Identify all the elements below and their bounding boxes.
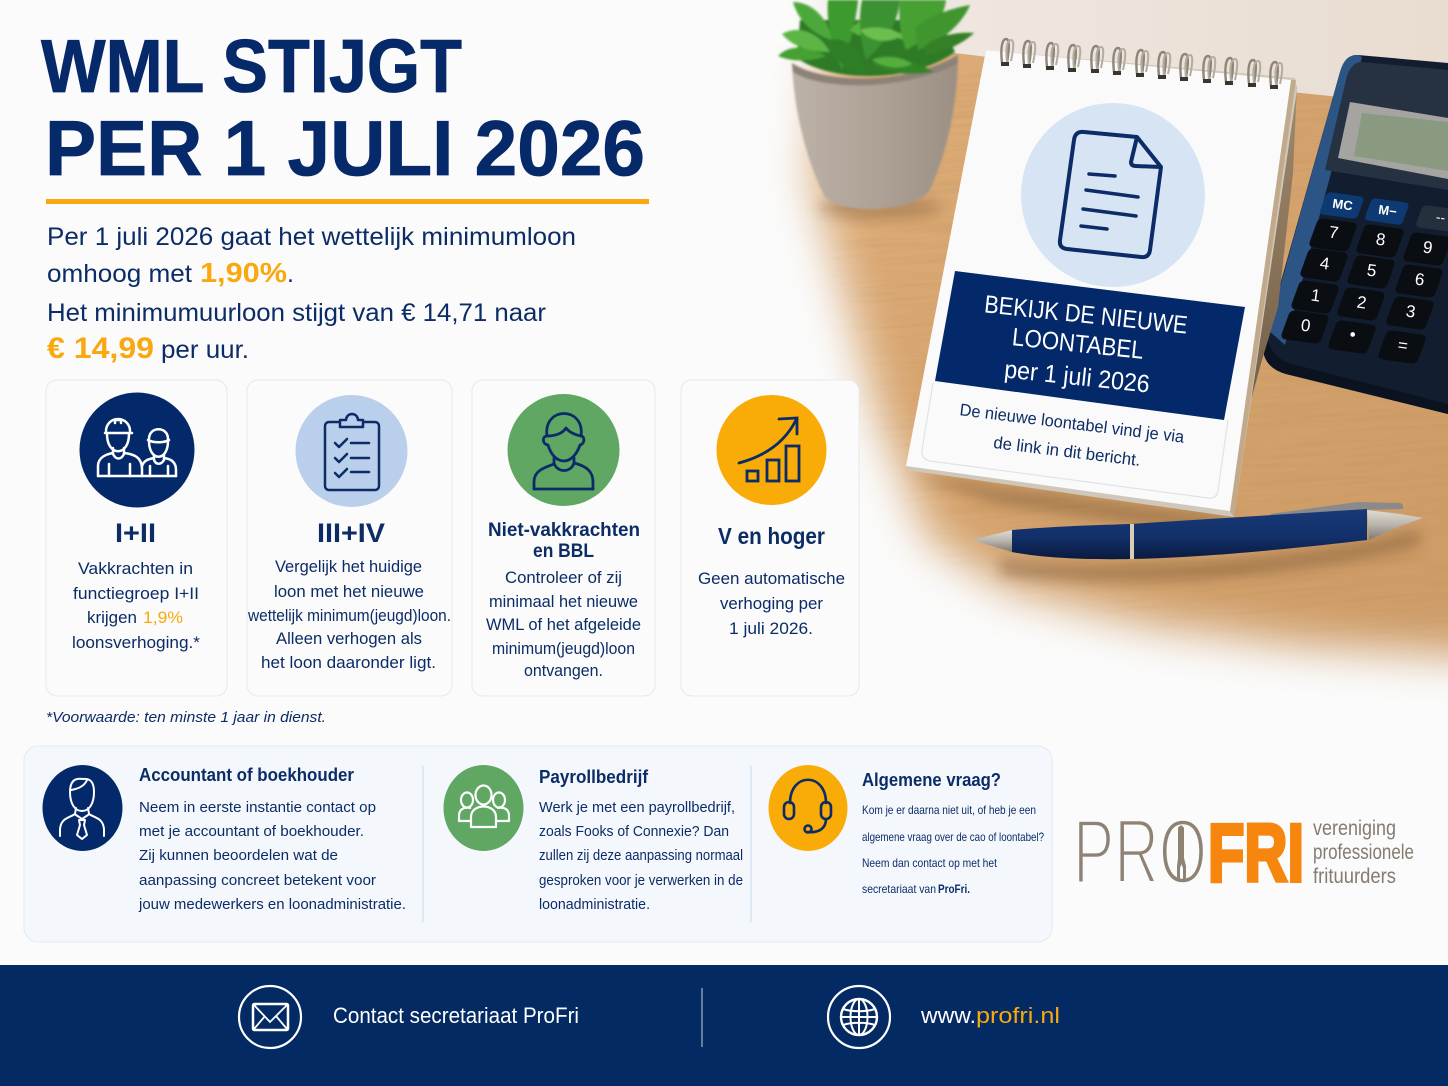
heading	[488, 519, 640, 562]
body text: Zij kunnen beoordelen wat de	[139, 847, 338, 864]
icon: globe	[828, 986, 890, 1048]
panel: contact options	[24, 746, 1052, 942]
icon: rising chart	[716, 395, 826, 505]
body text: wettelijk minimum(jeugd)loon.	[247, 606, 451, 625]
icon: clipboard	[296, 395, 408, 507]
icon: headset	[768, 765, 848, 851]
body text: Neem dan contact op met het	[862, 856, 998, 870]
pen	[972, 502, 1423, 582]
notebook note: De nieuwe loontabel vind je via	[959, 400, 1186, 447]
body text: Werk je met een payrollbedrijf,	[539, 799, 735, 816]
body text: minimaal het nieuwe	[489, 592, 638, 611]
notebook note	[922, 383, 1228, 498]
heading: Algemene vraag?	[862, 770, 1001, 790]
key labels: =	[1397, 335, 1409, 356]
photo: desk with plant, notebook, calculator and pen	[776, 0, 1448, 688]
intro text: omhoog met	[47, 260, 192, 288]
intro text: € 14,99	[47, 332, 154, 365]
heading: Payrollbedrijf	[539, 767, 649, 787]
body text: zullen zij deze aanpassing normaal	[539, 847, 743, 864]
banner	[935, 271, 1245, 420]
body text	[72, 559, 200, 652]
banner text: per 1 juli 2026	[1003, 355, 1151, 399]
body text: zoals Fooks of Connexie? Dan	[539, 823, 729, 840]
title: WML STIJGT	[41, 24, 462, 108]
body text: jouw medewerkers en loonadministratie.	[138, 896, 406, 913]
intro text: Per 1 juli 2026 gaat het wettelijk minimumloon	[47, 223, 576, 251]
body text: het loon daaronder ligt.	[261, 653, 436, 672]
footer bar	[0, 965, 1448, 1086]
key labels	[1300, 196, 1447, 356]
logo: ProFri: FRI	[1208, 808, 1304, 899]
body text: ontvangen.	[524, 661, 603, 680]
notebook	[906, 39, 1297, 538]
body text: loon met het nieuwe	[274, 582, 424, 601]
body text: Geen automatische	[698, 569, 845, 588]
heading: I+II	[115, 518, 156, 548]
contact: payroll	[444, 765, 743, 913]
key labels: 1	[1310, 285, 1322, 306]
body text: secretariaat van	[862, 882, 936, 896]
heading: III+IV	[317, 518, 385, 548]
body text: gesproken voor je verwerken in de	[539, 872, 743, 889]
contact: general question	[768, 765, 1044, 896]
logo: ProFri: frituurders	[1313, 865, 1396, 888]
icon: workers	[80, 392, 194, 508]
title	[41, 24, 645, 192]
icon: envelope	[239, 986, 301, 1048]
title: PER 1 JULI 2026	[45, 104, 645, 192]
body text: loonsverhoging.*	[72, 633, 200, 652]
body text: krijgen	[87, 608, 137, 627]
card: III+IV	[247, 380, 452, 696]
key labels: 0	[1300, 315, 1312, 336]
body text: aanpassing concreet betekent voor	[139, 872, 376, 889]
card: I+II	[46, 380, 227, 696]
heading: V en hoger	[718, 523, 825, 549]
contact: accountant	[42, 765, 406, 913]
body text: loonadministratie.	[539, 896, 650, 913]
body text: functiegroep I+II	[73, 584, 199, 603]
key labels: 2	[1356, 292, 1368, 313]
body text: Alleen verhogen als	[276, 629, 422, 648]
footnote: *Voorwaarde: ten minste 1 jaar in dienst.	[46, 709, 326, 726]
key labels: •	[1348, 325, 1357, 344]
icon: accountant	[42, 765, 122, 851]
website: www.	[920, 1003, 976, 1028]
intro text: per uur.	[161, 336, 249, 364]
key labels: M−	[1377, 202, 1398, 219]
heading: Accountant of boekhouder	[139, 765, 354, 785]
key labels: 6	[1414, 269, 1426, 290]
body text: minimum(jeugd)loon	[492, 639, 635, 658]
intro text: Het minimumuurloon stijgt van € 14,71 naar	[47, 299, 546, 327]
body text: Kom je er daarna niet uit, of heb je een	[862, 803, 1036, 817]
intro text: 1,90%	[200, 257, 287, 288]
body text: Controleer of zij	[505, 568, 622, 587]
body text	[247, 557, 451, 672]
website: profri.nl	[976, 1003, 1060, 1028]
heading: Niet-vakkrachten	[488, 519, 640, 541]
key labels: MC	[1332, 196, 1354, 213]
heading: en BBL	[533, 540, 594, 562]
body text: met je accountant of boekhouder.	[139, 823, 364, 840]
body text: Vakkrachten in	[78, 559, 193, 578]
document icon	[1021, 103, 1205, 287]
body text: verhoging per	[720, 594, 823, 613]
key labels: 8	[1375, 229, 1387, 250]
card: Niet-vakkrachten en BBL	[472, 380, 655, 696]
contact label: Contact secretariaat ProFri	[333, 1003, 579, 1028]
body text: 1 juli 2026.	[729, 619, 813, 638]
title underline	[46, 199, 649, 204]
card: V en hoger	[681, 380, 859, 696]
calculator	[1263, 55, 1448, 414]
key labels: 3	[1405, 301, 1417, 322]
body text	[486, 568, 641, 680]
body text: 1,9%	[143, 608, 183, 627]
body text	[539, 799, 743, 913]
key labels: 5	[1366, 260, 1378, 281]
body text: ProFri.	[938, 882, 970, 896]
banner text: LOONTABEL	[1011, 323, 1145, 365]
body text: WML of het afgeleide	[486, 615, 641, 634]
body text	[138, 799, 406, 913]
calculator keys	[1280, 192, 1448, 364]
key labels: --	[1435, 208, 1447, 226]
website	[920, 1003, 1060, 1028]
notebook note: de link in dit bericht.	[992, 433, 1142, 470]
body text	[862, 803, 1044, 896]
key labels: 4	[1319, 253, 1331, 274]
banner text: BEKIJK DE NIEUWE	[983, 290, 1189, 340]
body text	[698, 569, 845, 638]
plant in pot	[778, 0, 974, 219]
icon: group of people	[444, 765, 524, 851]
key labels: 7	[1328, 222, 1340, 243]
icon: person	[508, 394, 620, 506]
banner text	[983, 290, 1189, 399]
logo: ProFri: vereniging	[1313, 817, 1396, 840]
desk and wall	[782, 0, 1448, 688]
spiral binding	[1001, 39, 1282, 89]
logo: ProFri: PRO	[1073, 801, 1207, 903]
key labels: 9	[1422, 237, 1434, 258]
intro text: .	[287, 260, 294, 288]
logo: ProFri	[1073, 801, 1414, 903]
body text: algemene vraag over de cao of loontabel?	[862, 830, 1044, 844]
body text: Neem in eerste instantie contact op	[139, 799, 376, 816]
intro text	[47, 223, 576, 365]
body text: Vergelijk het huidige	[275, 557, 422, 576]
logo: ProFri: professionele	[1313, 841, 1414, 864]
